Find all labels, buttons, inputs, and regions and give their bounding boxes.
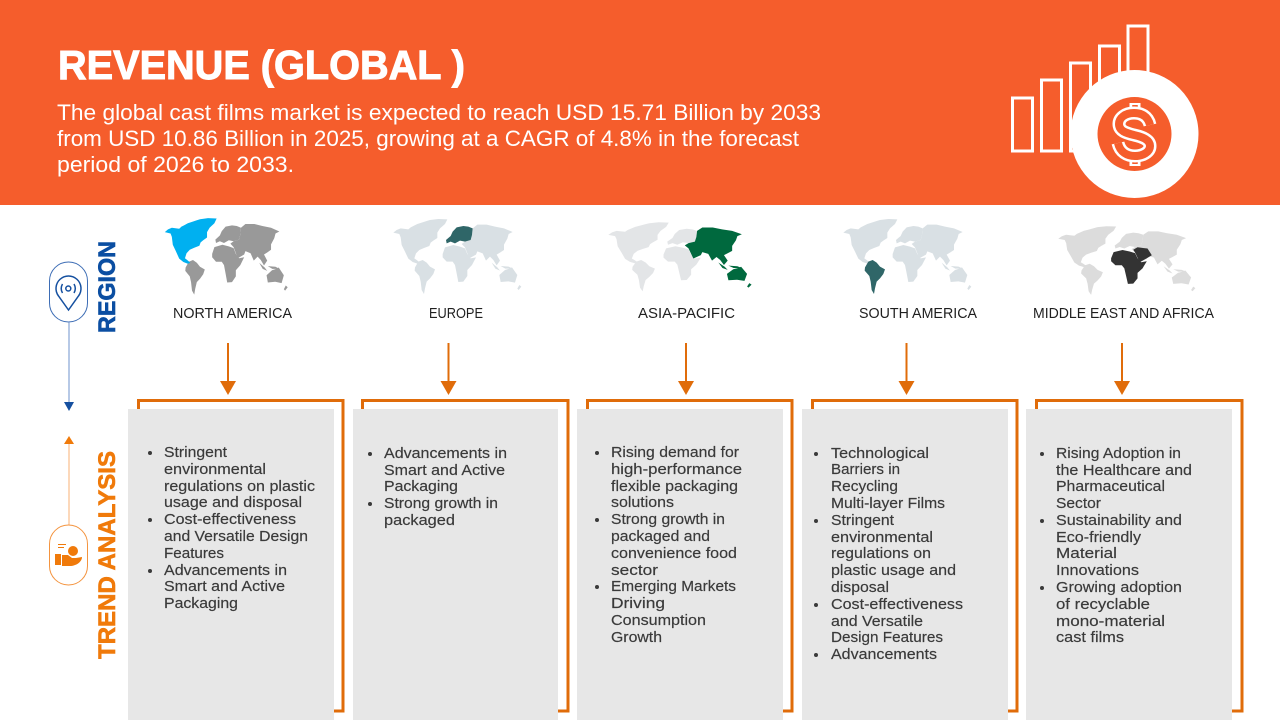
description text: period of 2026 to 2033. — [57, 152, 294, 177]
panel: North America trends: Packaging — [164, 595, 238, 612]
icon: hand holding coin — [55, 544, 82, 566]
panel: South America trends: Technological — [831, 445, 929, 462]
map: Europe — [393, 219, 521, 294]
panel: Middle East and Africa trends: of recyclable — [1056, 596, 1150, 613]
panel: Middle East and Africa trends — [1026, 400, 1242, 720]
panel: Asia-Pacific trends: flexible packaging — [611, 478, 738, 495]
panel: Asia-Pacific trends: Rising demand for — [611, 444, 739, 461]
panel: Asia-Pacific trends: Growth — [611, 629, 662, 646]
panel: South America trends — [802, 400, 1017, 720]
panel: Asia-Pacific trends: Consumption — [611, 612, 706, 629]
panel: Middle East and Africa trends: Rising Adoption in — [1056, 445, 1181, 462]
panel: Asia-Pacific trends: sector — [611, 562, 658, 579]
panel: Middle East and Africa trends: mono-material — [1056, 613, 1165, 630]
region labels: MIDDLE EAST AND AFRICA — [1033, 306, 1214, 322]
panel: Middle East and Africa trends: Growing adoption — [1056, 579, 1182, 596]
region labels: SOUTH AMERICA — [859, 306, 977, 322]
header banner — [0, 0, 1280, 205]
region labels — [173, 306, 1214, 322]
panel: Middle East and Africa trends: Sustainability and — [1056, 512, 1182, 529]
panel: Asia-Pacific trends: high-performance — [611, 461, 742, 478]
region labels: ASIA-PACIFIC — [638, 306, 735, 322]
region side label with pin icon and arrow: REGION — [94, 241, 121, 333]
panel: Asia-Pacific trends: Driving — [611, 595, 665, 612]
panel: North America trends: usage and disposal — [164, 494, 302, 511]
panel: North America trends: Stringent — [164, 444, 228, 461]
panel: South America trends: regulations on — [831, 545, 931, 562]
map: South America — [843, 219, 971, 294]
trend analysis side label with hand icon and arrow: TREND ANALYSIS — [94, 451, 121, 659]
region labels: NORTH AMERICA — [173, 306, 292, 322]
panel: Middle East and Africa trends: Eco-friendly — [1056, 529, 1142, 546]
panel: South America trends: Barriers in — [831, 461, 900, 478]
region side label with pin icon and arrow — [50, 241, 121, 411]
title: REVENUE (GLOBAL ) — [58, 42, 465, 88]
map: North America — [165, 218, 288, 295]
panel: Europe trends: Smart and Active — [384, 462, 505, 479]
panel: South America trends: Advancements — [831, 646, 937, 663]
panel: South America trends: and Versatile — [831, 613, 923, 630]
panel: North America trends: Advancements in — [164, 562, 287, 579]
panel: North America trends: environmental — [164, 461, 266, 478]
icon: location pin — [56, 276, 81, 310]
panel: Middle East and Africa trends: Material — [1056, 545, 1117, 562]
panel: South America trends: Stringent — [831, 512, 895, 529]
panel: Middle East and Africa trends: Sector — [1056, 495, 1101, 512]
panel: Asia-Pacific trends: Strong growth in — [611, 511, 725, 528]
map: Middle East and Africa — [1058, 226, 1195, 295]
panel: Middle East and Africa trends: the Healthcare and — [1056, 462, 1192, 479]
panel: South America trends: Design Features — [831, 629, 943, 646]
panel: South America trends: Recycling — [831, 478, 898, 495]
panel: Europe trends: Advancements in — [384, 445, 507, 462]
description text: from USD 10.86 Billion in 2025, growing at a CAGR of 4.8% in the forecast — [57, 126, 799, 151]
panel: North America trends: Smart and Active — [164, 578, 285, 595]
panel: Middle East and Africa trends: Innovations — [1056, 562, 1139, 579]
panel: South America trends: Cost-effectiveness — [831, 596, 963, 613]
description text: The global cast films market is expected to reach USD 15.71 Billion by 2033 — [57, 100, 821, 125]
panel: Middle East and Africa trends: Pharmaceutical — [1056, 478, 1165, 495]
panel: North America trends: Cost-effectiveness — [164, 511, 296, 528]
panel: South America trends: Multi-layer Films — [831, 495, 945, 512]
description text — [57, 100, 821, 177]
panel: North America trends: and Versatile Design — [164, 528, 308, 545]
panel: South America trends: plastic usage and — [831, 562, 956, 579]
map: Asia-Pacific — [608, 222, 752, 291]
panel: South America trends: disposal — [831, 579, 889, 596]
panel: North America trends — [128, 400, 343, 720]
icon: revenue bars and dollar coin — [1012, 26, 1198, 198]
panel: Asia-Pacific trends: solutions — [611, 494, 674, 511]
panel: Asia-Pacific trends: packaged and — [611, 528, 710, 545]
region labels: EUROPE — [429, 306, 483, 322]
panel: Asia-Pacific trends — [577, 400, 792, 720]
panel: Europe trends: packaged — [384, 512, 455, 529]
panel: Europe trends: Strong growth in — [384, 495, 498, 512]
panel: North America trends: regulations on plastic — [164, 478, 316, 495]
arrows from regions to panels — [220, 343, 1130, 395]
panel: North America trends: Features — [164, 545, 224, 562]
panel: Middle East and Africa trends: cast films — [1056, 629, 1124, 646]
panel: Europe trends: Packaging — [384, 478, 458, 495]
panel: South America trends: environmental — [831, 529, 933, 546]
panel: Asia-Pacific trends: convenience food — [611, 545, 737, 562]
panel: Europe trends — [353, 400, 568, 720]
trend analysis side label with hand icon and arrow — [50, 436, 121, 659]
panel: Asia-Pacific trends: Emerging Markets — [611, 578, 736, 595]
